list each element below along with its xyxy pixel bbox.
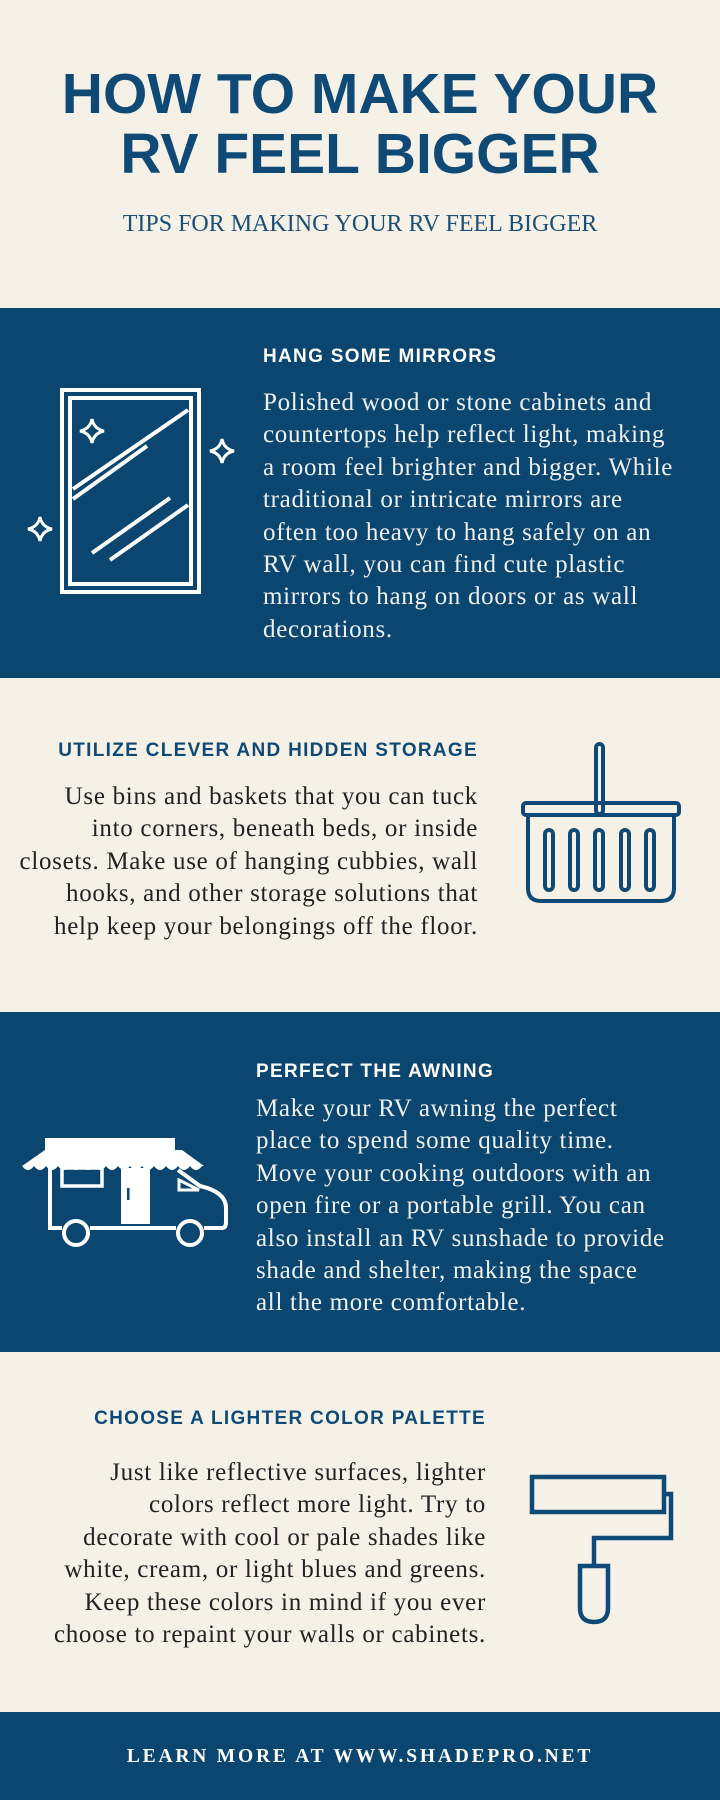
text block: palette: decorate with cool or pale shades like — [83, 1524, 486, 1551]
text block: awning: Move your cooking outdoors with an — [256, 1160, 651, 1187]
text block: mirrors: Polished wood or stone cabinets and — [263, 389, 652, 416]
panel: lighter color palette — [54, 1408, 674, 1648]
text block: mirrors: traditional or intricate mirrors are — [263, 486, 623, 513]
text block: mirrors: RV wall, you can find cute plastic — [263, 551, 625, 578]
title: RV FEEL BIGGER — [120, 122, 600, 186]
text block: awning: place to spend some quality time. — [256, 1127, 614, 1154]
footer — [0, 1712, 720, 1800]
title: HOW TO MAKE YOUR — [62, 62, 658, 126]
text block: palette — [54, 1459, 486, 1648]
text block: mirrors: countertops help reflect light, making — [263, 421, 665, 448]
text block: palette: Just like reflective surfaces, lighter — [110, 1459, 486, 1486]
text block: mirrors: decorations. — [263, 616, 393, 643]
icon: paint roller — [530, 1474, 674, 1624]
text block: awning: all the more comfortable. — [256, 1289, 526, 1316]
text block: awning: also install an RV sunshade to provide — [256, 1225, 665, 1252]
text block: storage — [20, 783, 478, 940]
icon: basket — [521, 742, 681, 903]
text block: storage: hooks, and other storage solutions that — [66, 880, 478, 907]
text block: mirrors: a room feel brighter and bigger. While — [263, 454, 673, 481]
panel: clever storage — [20, 740, 681, 940]
text block: palette: Keep these colors in mind if you ever — [84, 1589, 486, 1616]
icon: mirror — [28, 388, 234, 594]
text block: storage: closets. Make use of hanging cubbies, wall — [20, 848, 478, 875]
text block: awning: open fire or a portable grill. You can — [256, 1192, 646, 1219]
text block: mirrors: often too heavy to hang safely on an — [263, 519, 651, 546]
text block: mirrors — [263, 389, 673, 643]
text block: mirrors: mirrors to hang on doors or as wall — [263, 583, 638, 610]
heading: storage: UTILIZE CLEVER AND HIDDEN STORAGE — [58, 740, 478, 761]
subtitle: TIPS FOR MAKING YOUR RV FEEL BIGGER — [123, 211, 597, 237]
text block: palette: colors reflect more light. Try to — [149, 1491, 486, 1518]
heading: hang some mirrors: HANG SOME MIRRORS — [263, 346, 497, 367]
text block: palette: choose to repaint your walls or cabinets. — [54, 1621, 486, 1648]
text block: storage: into corners, beneath beds, or inside — [92, 815, 478, 842]
panel: perfect the awning — [0, 1012, 720, 1352]
text block: awning — [256, 1095, 665, 1316]
heading: awning: PERFECT THE AWNING — [256, 1061, 494, 1082]
heading: palette: CHOOSE A LIGHTER COLOR PALETTE — [94, 1408, 486, 1429]
footer text: LEARN MORE AT WWW.SHADEPRO.NET — [127, 1746, 593, 1767]
text block: storage: help keep your belongings off the floor. — [54, 913, 478, 940]
text block: palette: white, cream, or light blues and greens. — [64, 1556, 486, 1583]
text block: awning: shade and shelter, making the space — [256, 1257, 638, 1284]
text block: awning: Make your RV awning the perfect — [256, 1095, 618, 1122]
text block: storage: Use bins and baskets that you can tuck — [65, 783, 478, 810]
panel: hang some mirrors — [0, 308, 720, 678]
title — [62, 62, 658, 186]
icon: rv with awning — [22, 1138, 228, 1247]
